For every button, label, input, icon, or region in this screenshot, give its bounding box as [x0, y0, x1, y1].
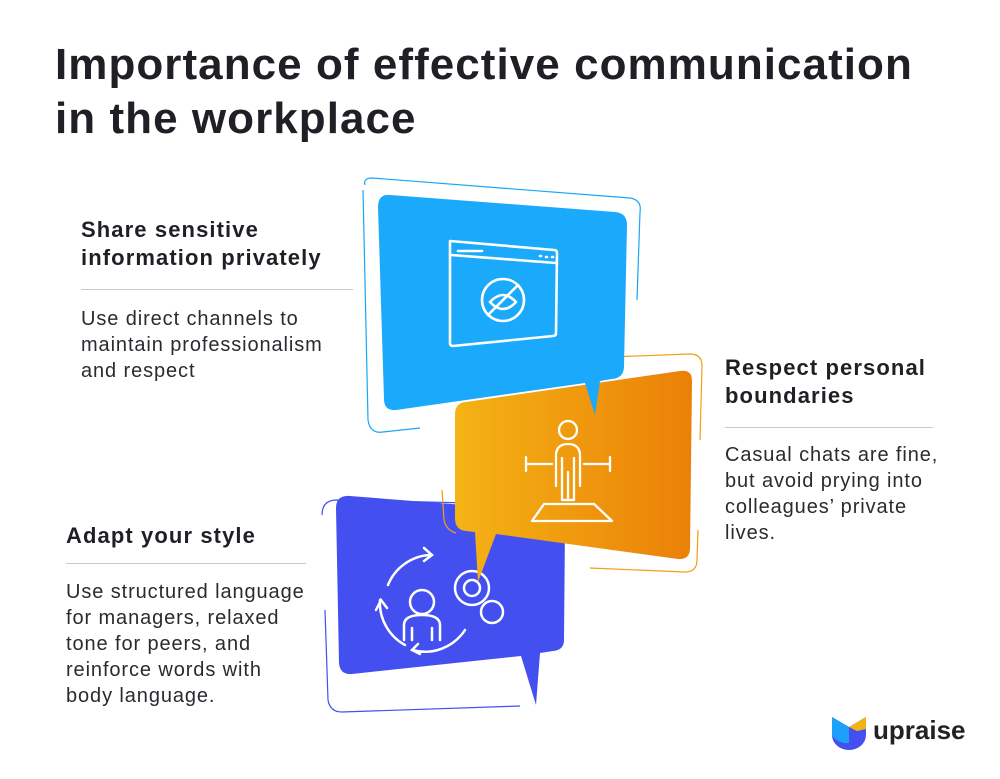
text block: respect boundaries: but avoid prying into	[725, 470, 923, 492]
text block: respect boundaries: lives.	[725, 522, 776, 544]
text block: share sensitive information: and respect	[81, 360, 195, 382]
text block: adapt style: body language.	[66, 685, 215, 707]
text block: adapt style: tone for peers, and	[66, 633, 251, 655]
text block: adapt style: reinforce words with	[66, 659, 262, 681]
text block: adapt style: Use structured language	[66, 581, 305, 603]
title	[55, 40, 913, 143]
logo: upraise	[832, 715, 966, 750]
text block: respect boundaries	[725, 355, 938, 544]
text block: share sensitive information: Share sensitive	[81, 217, 259, 242]
logo: upraise: upraise	[873, 715, 966, 745]
text block: adapt style	[66, 523, 306, 707]
text block: respect boundaries: boundaries	[725, 383, 855, 408]
title: Importance of effective communication	[55, 40, 913, 89]
bubble: purple	[322, 496, 565, 712]
text block: share sensitive information	[81, 217, 353, 382]
text block: adapt style: for managers, relaxed	[66, 607, 279, 629]
text block: share sensitive information: Use direct channels to	[81, 308, 299, 330]
text block: respect boundaries: Casual chats are fine,	[725, 444, 938, 466]
text block: respect boundaries: colleagues’ private	[725, 496, 907, 518]
bubble: blue	[363, 178, 640, 432]
text block: adapt style: Adapt your style	[66, 523, 256, 548]
text block: share sensitive information: maintain professionalism	[81, 334, 323, 356]
text block: share sensitive information: information privately	[81, 245, 322, 270]
text block: respect boundaries: Respect personal	[725, 355, 926, 380]
title: in the workplace	[55, 94, 417, 143]
bubble: orange	[442, 354, 702, 582]
